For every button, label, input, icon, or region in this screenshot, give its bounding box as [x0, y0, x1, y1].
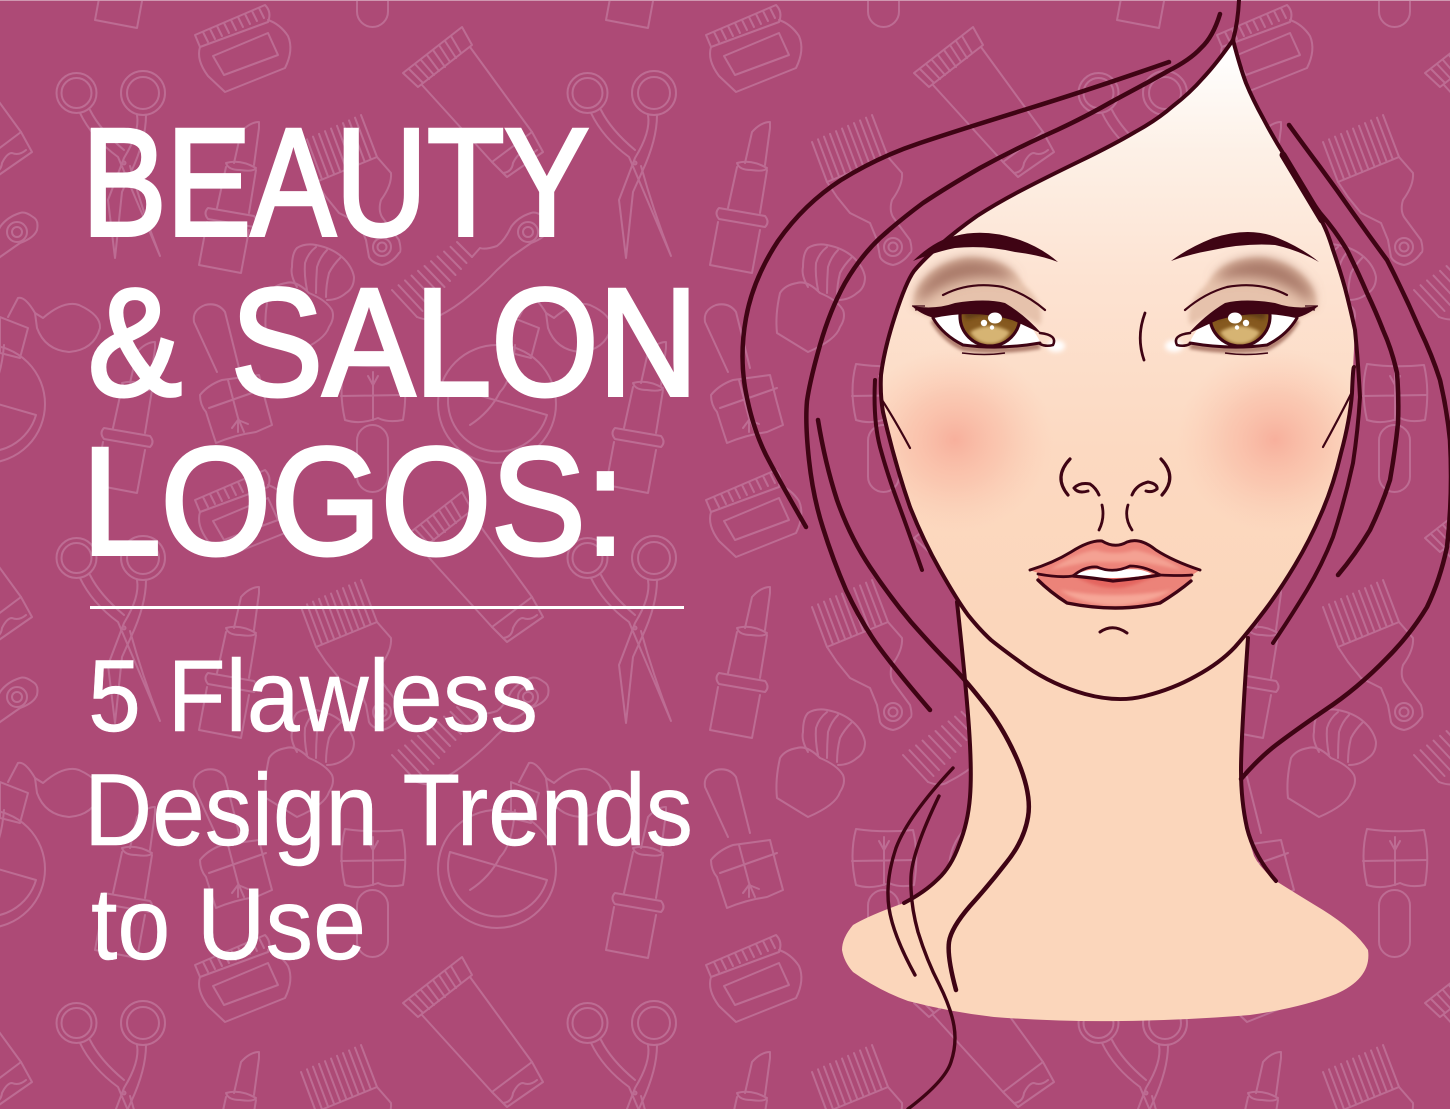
right short cheek strand [1323, 390, 1353, 447]
title: Beauty & Salon Logos [82, 97, 698, 587]
right outer strand [1241, 125, 1450, 779]
right eye with makeup [1165, 258, 1318, 354]
subtitle: 5 Flawless Design Trends to Use [84, 639, 693, 981]
hair strands [742, 14, 1450, 1109]
subtitle line 1: 5 Flawless [88, 639, 538, 753]
left face-side strand [875, 380, 922, 570]
chin mark [1100, 628, 1127, 633]
face skin [881, 40, 1355, 699]
lower thin strand B [908, 796, 955, 1109]
subtitle line 2: Design Trends [84, 753, 693, 867]
nose [1061, 313, 1170, 530]
strand running over the neck [818, 420, 1029, 990]
right eyebrow [1171, 232, 1319, 262]
left eye with makeup [912, 258, 1065, 354]
neck and shoulders [842, 605, 1368, 1021]
title line 3: LOGOS: [82, 416, 625, 587]
divider rule [90, 606, 684, 609]
lower thin strand A [888, 768, 953, 975]
subtitle line 3: to Use [91, 867, 366, 981]
left second strand [806, 14, 1220, 710]
lips [1030, 541, 1200, 608]
right middle strand [1287, 163, 1398, 575]
illustration: woman's face [742, 0, 1450, 1109]
left outer strand [742, 62, 1169, 527]
eye highlights [981, 312, 1249, 330]
title line 1: BEAUTY [82, 97, 589, 268]
title line 2: salon: SALON [231, 257, 698, 428]
title line 2: ampersand: & [88, 257, 182, 428]
left short cheek strand [882, 400, 910, 448]
blush on cheeks [888, 370, 1344, 504]
face and neck outlines [881, 0, 1360, 903]
left eyebrow [913, 233, 1058, 262]
